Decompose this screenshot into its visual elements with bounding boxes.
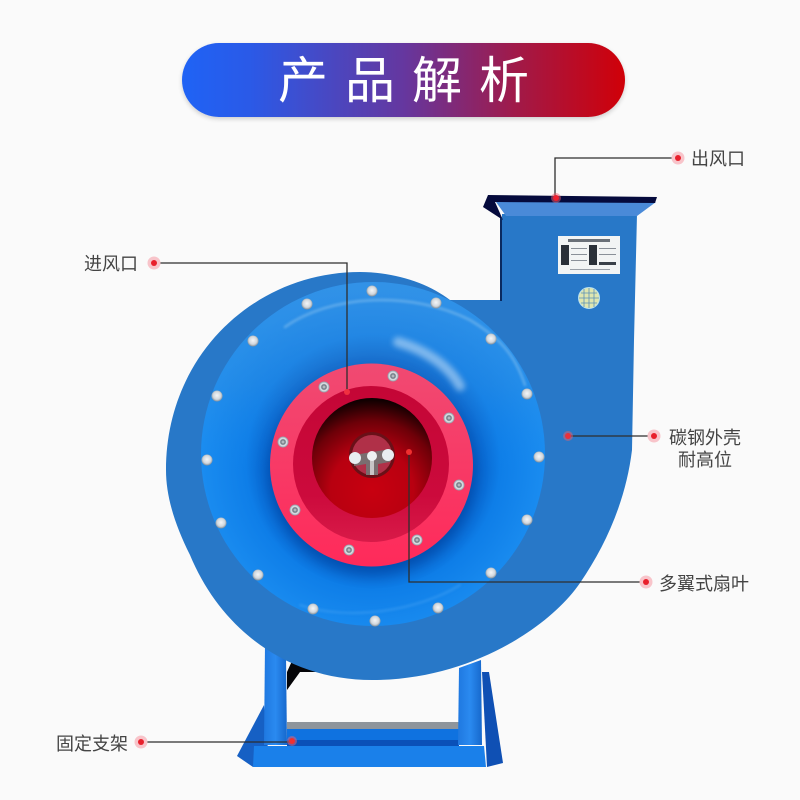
labels: 耐高位: [678, 450, 732, 470]
stand: [237, 644, 503, 767]
callout dots: [134, 152, 684, 748]
labels: 固定支架: [56, 734, 128, 754]
callout lines: [141, 158, 678, 742]
outlet flange: [483, 195, 657, 301]
fan illustration and callouts: [58, 150, 748, 767]
outer rivets: [202, 286, 544, 626]
labels: 多翼式扇叶: [659, 574, 749, 594]
disc highlights: [285, 300, 525, 613]
inlet ring: [269, 364, 475, 575]
labels: 进风口: [84, 254, 138, 274]
nameplate: [558, 236, 620, 274]
title: 产品解析: [278, 41, 546, 113]
volute casing: [166, 214, 637, 680]
labels: [56, 149, 749, 754]
labels: 出风口: [691, 149, 745, 169]
vent mesh: [578, 288, 600, 308]
title: [182, 43, 625, 117]
fan hub: [349, 432, 395, 478]
labels: 碳钢外壳: [669, 428, 741, 448]
front disc: [201, 282, 545, 626]
